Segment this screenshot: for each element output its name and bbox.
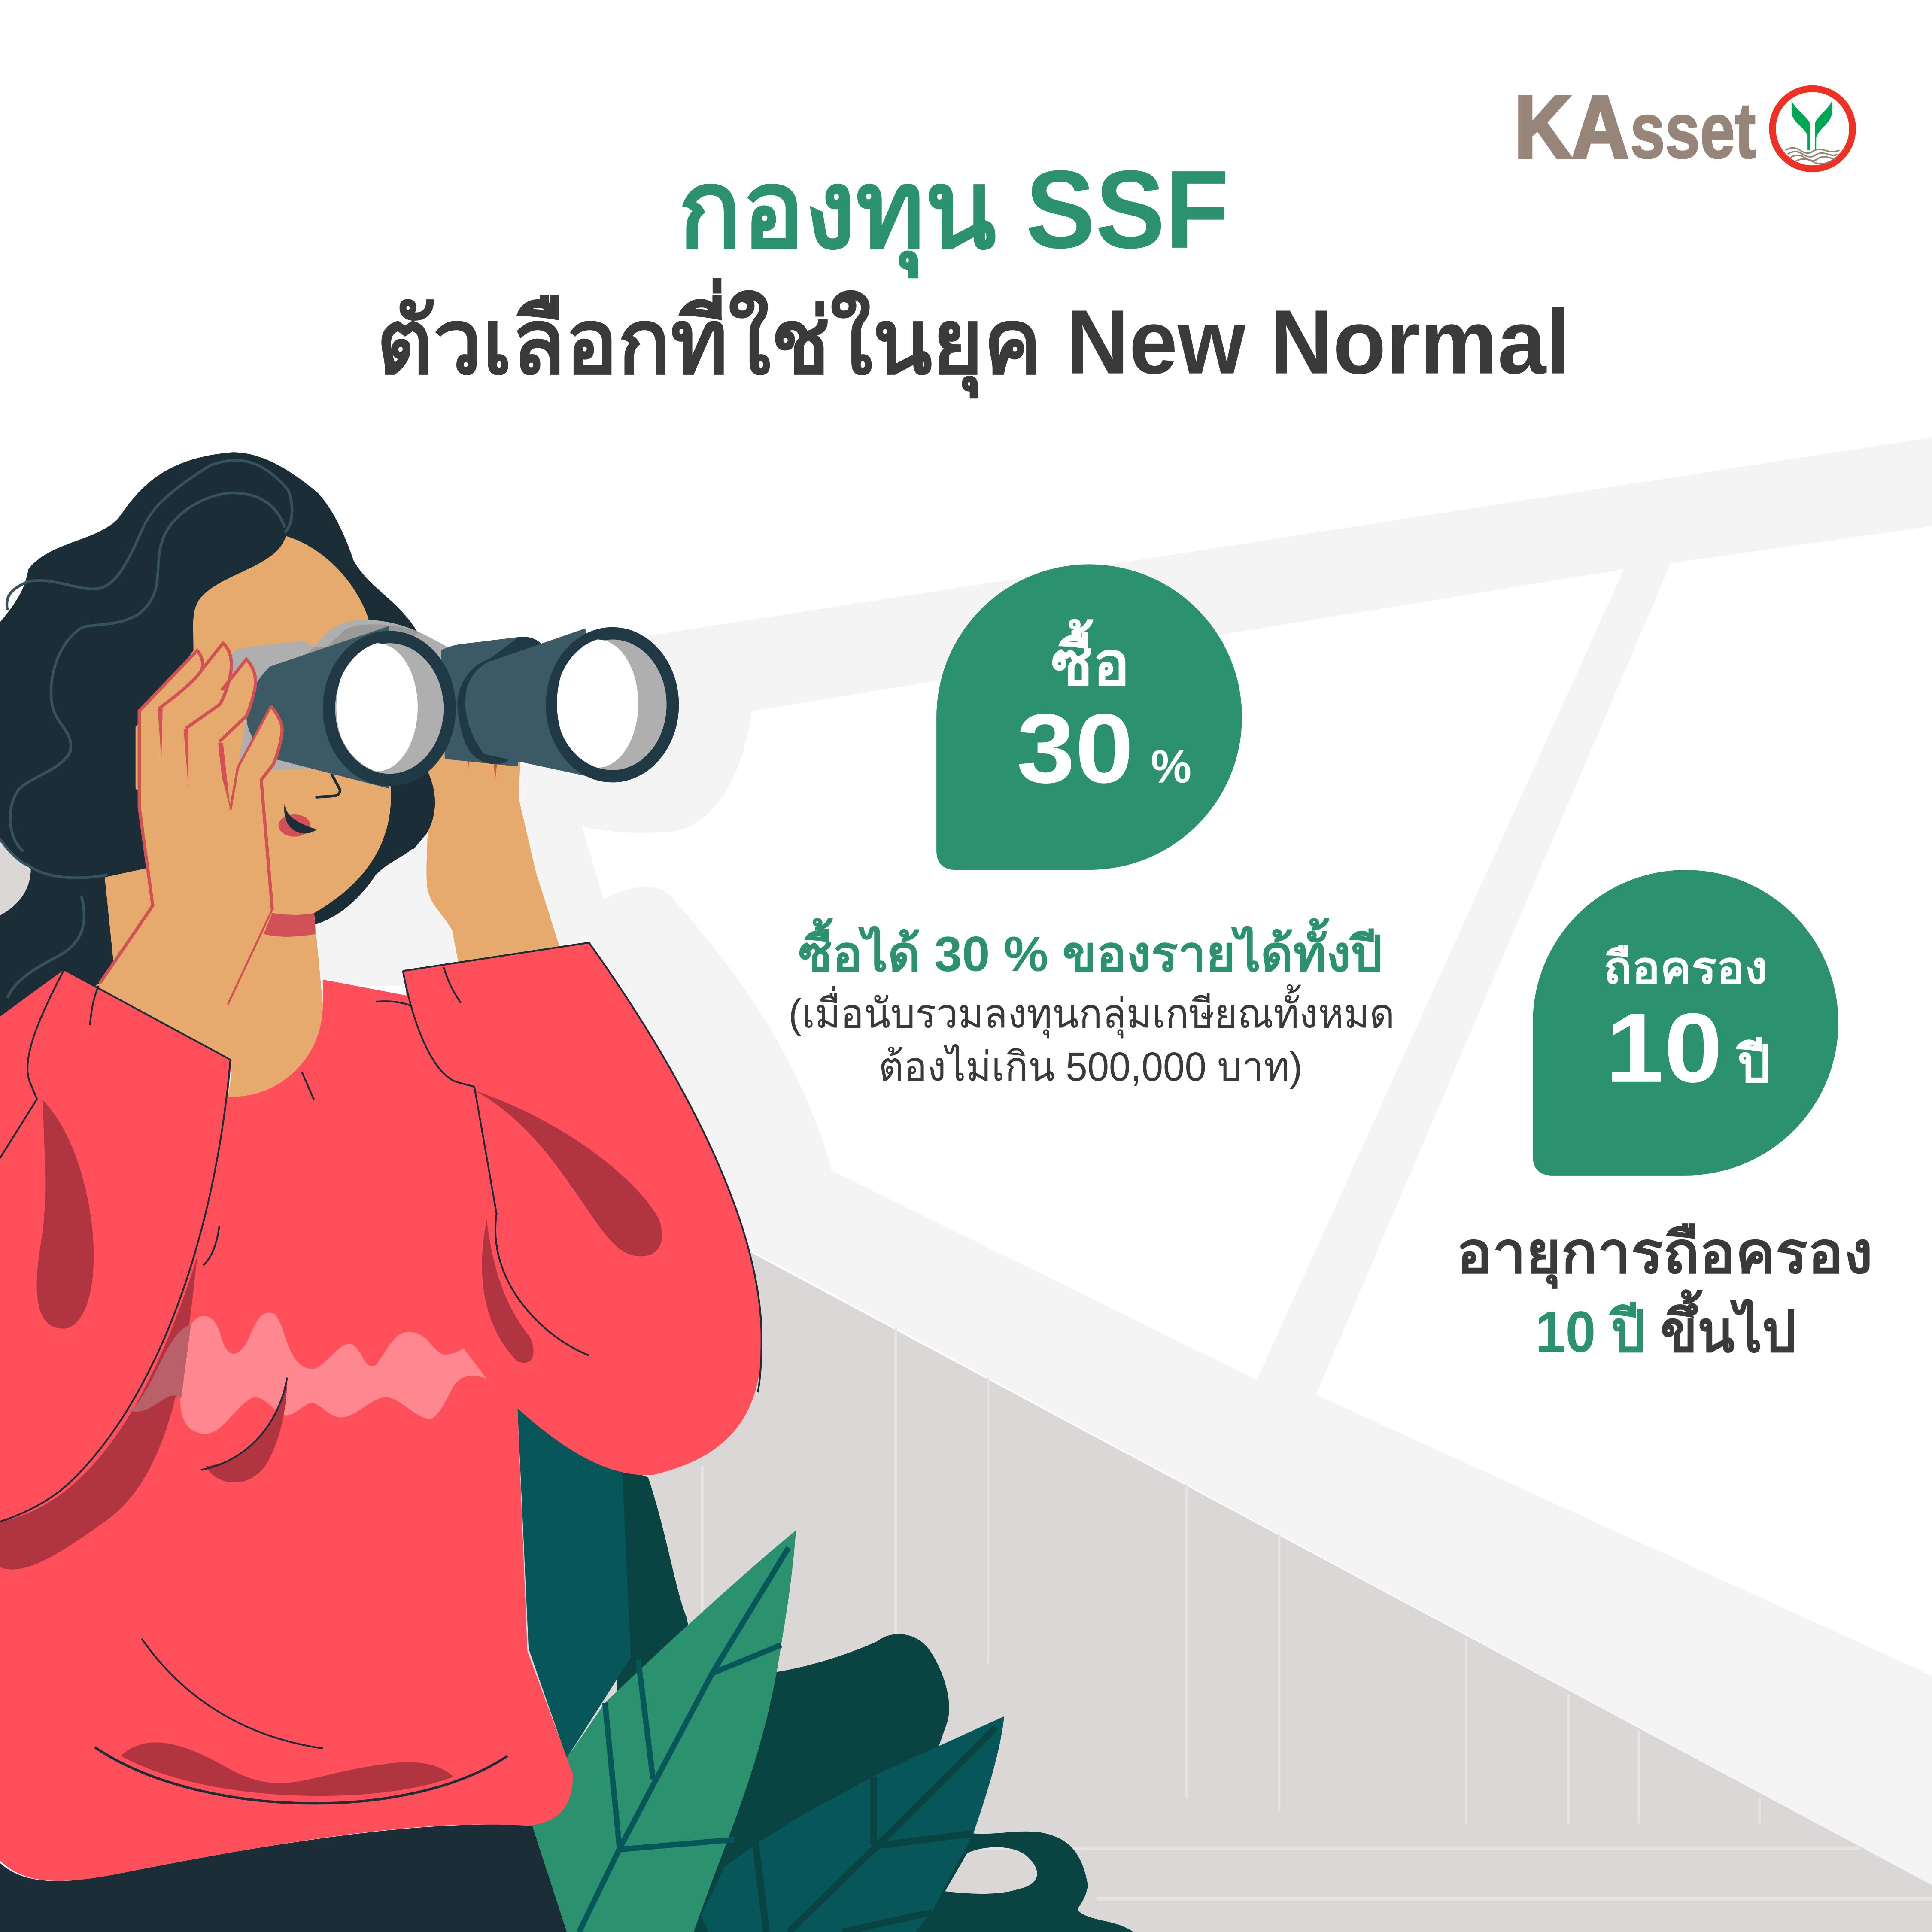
window pane left xyxy=(582,569,1624,1380)
text block: 30 percent xyxy=(789,917,1395,1090)
badge number: 30 xyxy=(1017,693,1133,803)
hand xyxy=(100,643,282,1060)
binoculars xyxy=(222,620,673,789)
badge number: 10 xyxy=(1605,993,1722,1103)
badge label: ถือครอง xyxy=(1604,943,1768,993)
mouth xyxy=(284,803,317,833)
torso sweater xyxy=(0,942,762,1881)
sweater lines xyxy=(0,942,762,1803)
title line 1: กองทุน SSF xyxy=(678,147,1229,279)
text detail line 1: (เมื่อนับรวมลงทุนกลุ่มเกษียณทั้งหมด xyxy=(789,984,1395,1038)
badge shape xyxy=(1533,870,1838,1176)
barrel joint xyxy=(457,637,542,764)
green leaf xyxy=(527,1530,796,1932)
trousers xyxy=(0,1825,567,1932)
text detail line 2: ต้องไม่เกิน 500,000 บาท) xyxy=(878,1044,1302,1090)
logo wordmark: KA xyxy=(1514,77,1629,176)
hair xyxy=(0,452,433,1020)
cheek xyxy=(279,814,310,837)
right arm xyxy=(426,739,559,962)
badge unit: ปี xyxy=(1735,1035,1771,1093)
badge label: ซื้อ xyxy=(1051,619,1130,699)
neck and chest xyxy=(86,863,323,1097)
title line 2: ตัวเลือกที่ใช่ในยุค New Normal xyxy=(377,278,1571,399)
text line 2: 10 ปี ขึ้นไป xyxy=(1535,1289,1796,1364)
left lens xyxy=(329,637,450,780)
left barrel back xyxy=(222,620,447,770)
teal leaf xyxy=(701,1716,1004,1932)
wall blob behind hair xyxy=(0,826,49,924)
text heading: ซื้อได้ 30 % ของรายได้ทั้งปี xyxy=(799,917,1382,981)
right lens xyxy=(552,633,673,776)
sleeve shadows xyxy=(0,1091,662,1796)
logo emblem xyxy=(1772,89,1853,169)
hair bulge over arm xyxy=(401,766,435,850)
callout: 10 years xyxy=(1533,870,1838,1176)
window frame background xyxy=(296,437,1932,1932)
title xyxy=(377,147,1571,399)
text block: holding period xyxy=(1456,1221,1873,1364)
hair grey cutout xyxy=(0,840,31,915)
plant xyxy=(517,1408,1133,1932)
logo xyxy=(1514,77,1853,176)
face xyxy=(136,536,391,913)
badge shape xyxy=(936,564,1242,870)
right barrel back xyxy=(441,637,542,766)
hair strands xyxy=(0,460,292,998)
left barrel body xyxy=(246,626,389,789)
arm detail lines xyxy=(467,758,498,779)
right barrel body xyxy=(465,629,610,781)
plant dark blob xyxy=(690,1634,1133,1932)
woman xyxy=(0,452,762,1932)
logo wordmark: sset xyxy=(1630,86,1756,174)
badge unit: % xyxy=(1151,740,1191,793)
sweater wave pattern xyxy=(180,1313,487,1434)
choker xyxy=(264,913,316,937)
callout: 30 percent xyxy=(936,564,1242,870)
nose xyxy=(316,774,340,797)
window pane right xyxy=(1316,526,1932,1676)
text line 1: อายุการถือครอง xyxy=(1456,1221,1873,1289)
